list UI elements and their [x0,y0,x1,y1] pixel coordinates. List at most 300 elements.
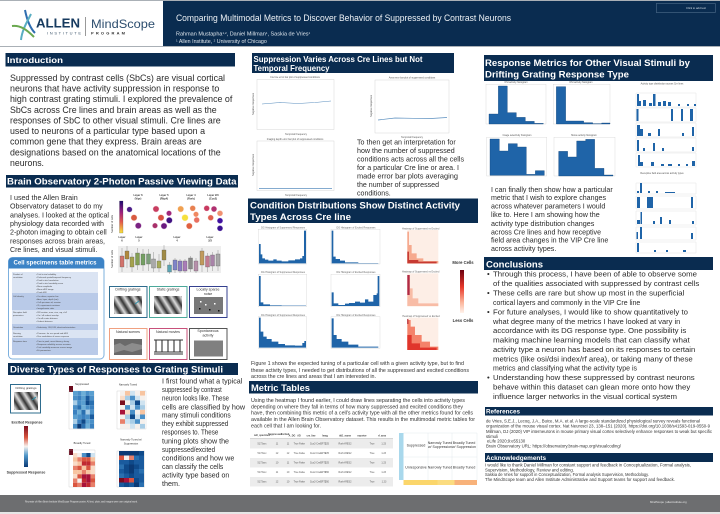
reference list: stimuli [486,434,498,439]
conclusions bullet list: • [487,289,490,298]
response metrics text: I can finally then show how a particular [491,186,613,194]
heatmap: narrowly tuned [117,382,146,429]
cell specimens table: • Fit parameters [36,349,51,352]
heading: introduction [6,53,235,66]
brain observatory text: physiology data recorded with [10,220,104,228]
multimodal metric table: True [370,480,375,484]
authors: 1 [266,31,268,35]
stacked bar charts: lower [636,172,696,253]
suppression text: how the number of suppressed [357,147,455,155]
multimodal metric table: 1.23 [381,442,387,446]
cell specimens table: • Response reliability across sessions [36,343,71,346]
drifting gratings key [10,384,40,413]
suppression text: the number of suppressed [357,181,439,189]
intro text: responses of SbC to other visual stimuli. Cre lines are [10,116,221,126]
acknowledgement text: The MindScope team and Allen Institute Administrative and Support teams for support and feedback. [485,477,675,482]
heading: response metrics: Drifting Grating Response Type [485,70,629,80]
layer dot map: Layer 2/3 [207,193,219,197]
histogram titles: DG Histogram of Excited Responses [337,271,376,274]
multimodal metric table: True [370,452,375,455]
multimodal metric table: Excited [281,433,290,436]
layer dot map: Number of cells [110,214,114,233]
line plot: brain area: Negative Responses [370,94,373,117]
panel: acknowledgements [485,453,713,482]
multimodal metric table: 12 [276,452,279,455]
heatmap: suppressed: Suppressed [75,382,89,386]
conclusions bullet list: metrics (like osi/dsi index/rf area), or taking many of these [493,354,693,363]
multimodal metric table: 11 [287,442,290,446]
bar chart titles: OSI activity histogram [504,81,528,84]
cell specimens table: • Mean dF/F image [36,289,54,291]
multimodal metric table: Cux2-CreERT2 [310,462,327,464]
activity type matrix: Narrowly Tuned [428,466,452,470]
cell specimens table: • Peak dF/F [36,292,48,294]
suppression text: To then get an interpretation for [357,138,456,146]
logo: Allen Institute MindScope Program: PROGRAM [91,30,126,36]
layer dot map: Layer 4 [186,193,196,197]
intro text: high contrast grating stimuli. I explored the prevalence of [10,94,233,104]
heading: conclusions: Conclusions [486,260,543,270]
multimodal metric table: 1.23 [381,462,387,464]
stimulus card: locally sparse noise: noise [204,292,212,296]
layer box plots: Layer [174,235,180,239]
cell specimens table: • Time to peak, onset latency, decay [36,340,70,343]
histogram titles: DG Histogram of Suppressed Responses [261,226,306,230]
button: click to add [656,4,715,12]
cell specimens table: • Preferred spatial/temporal frequency [36,276,72,279]
poster title: Comparing Multimodal Metrics to Discover Behavior of Suppressed by Contrast Neurons [176,13,512,23]
response metrics text: metric that I wish to explore changes [491,194,606,202]
figure caption: across the cre lines and areas that I am interested in. [251,374,376,380]
multimodal metric table: True [294,480,299,484]
layer dot map: (Vipr) [135,196,141,200]
multimodal metric table: 225 [325,452,330,455]
layer box plots [110,235,221,274]
multimodal metric table: 350 [325,471,330,474]
diverse responses text: cells are classified by how [162,402,246,411]
response metrics text: across activity types. [491,245,556,253]
intro text: neurons. [10,158,44,168]
cell specimens table: • Cell specimen id, session [36,302,62,304]
multimodal metric table: 1.23 [381,471,387,474]
multimodal metric table: 1.23 [382,480,387,484]
multimodal metric table: True [370,471,375,474]
response metrics text [491,186,613,253]
logo: Allen Institute MindScope Program: ALLEN [36,16,80,30]
line plot: cre line: Temporal Frequency [285,133,308,136]
multimodal metric table: Rorb-IRES2 [339,442,352,446]
multimodal metric table: cre_line [306,434,316,438]
intro text: designations based on the anatomical locations of the [10,148,221,158]
heading: suppression varies [252,53,454,73]
affiliations: 1 [176,38,178,42]
logo: Allen Institute MindScope Program [12,10,155,40]
conclusions bullet list: cortical layers and commonly in the VIP Cre line [493,298,640,307]
multimodal metric table: Cux2-CreERT2 [310,442,327,446]
heading: suppression varies: Temporal Frequency [254,63,330,73]
layer box plots: 6 [121,238,123,242]
drifting gratings key: Drifting gratings [15,386,37,390]
cell specimens table: correlation [13,276,24,279]
conclusions bullet list: influence larger networks in the visual cortical system [493,392,677,401]
bar chart titles: Image selectivity histogram [503,134,531,137]
cell specimens table: • On / off subunit overlap [36,314,60,317]
heatmap: broadly tuned: Broadly Tuned [74,441,91,445]
response metrics text: field area changes in the VIP Cre line [491,236,608,244]
heatmap: narrowly tuned with suppression: Narrowly Tuned w/ [120,438,142,442]
heading: response metrics [484,55,713,81]
bar charts: stimulus metric histograms [486,84,615,176]
conclusions bullet list: Through this process, I have been of able to observe some [493,270,697,279]
multimodal metric table: False [299,462,306,464]
activity type matrix: Suppressed [407,444,425,448]
heading: metric tables: Metric Tables [251,382,310,393]
layer box plots: 5 [138,238,140,242]
diverse responses text: conditions and how we [162,454,234,463]
authors: , Saskia de Vries [267,32,309,38]
metric tables text: available in the Allen Brain Observatory dataset. This results in the multimodal metric tables for [251,417,475,423]
intro text: SbCs across Cre lines and brain areas as well as the [10,105,217,115]
multimodal metric table: 5173xxx [258,442,267,446]
stacked bar charts: lower: Receptive field area across activity types [640,172,684,175]
multimodal metric table: True [370,442,375,446]
heatmap: narrowly tuned with suppression: Suppression [124,442,139,446]
diverse responses text: suppressed/excited [162,445,215,454]
line plot: cre line [252,76,334,136]
histogram row 1 [258,229,438,264]
diverse responses text: they exhibit suppressed [162,419,228,428]
multimodal metric table: 5173xxx [258,452,267,455]
histogram row 2 [258,273,438,307]
metric tables text: depending on where they fall in terms of how many suppressed and excited conditions they [251,404,463,410]
metric tables text: Using the heatmap I found earlier, I could draw lines separating the cells into activity types [251,398,465,404]
heading: references: References [486,408,521,416]
diverse responses text: can classify the cells [162,462,224,471]
panel: condition distributions [248,198,478,380]
conclusions bullet list: behave within this dataset can glean more onto how they [493,383,690,392]
figure caption: Figure 1 shows the expected tuning of a particular cell with a given activity type, but to find [251,361,464,367]
stimulus card: locally sparse noise [190,286,227,318]
diverse responses text: tuning plots show the [162,437,229,446]
stimulus card: static gratings: Static gratings [157,288,180,292]
metric tables text: each cell that I am looking for. [251,423,321,429]
authors: Rahman Mustapha [176,32,222,38]
stimulus card: drifting gratings: Drifting gratings [115,288,141,292]
multimodal metric table [250,433,393,486]
multimodal metric table: True [294,442,299,446]
layer box plots: Layer [119,235,125,239]
stimulus card: spontaneous activity: activity [203,334,214,338]
heatmap: broadly tuned [69,441,95,487]
line plot: brain area: Area error bar plot of suppressed conditions [389,76,436,80]
line plot: depth [252,138,334,197]
multimodal metric table: True [294,462,299,464]
diverse responses text: activity type based on [162,470,229,479]
cell specimens table: Running [13,333,22,335]
multimodal metric table: True [294,471,299,474]
multimodal metric table: Suppressed [268,433,282,436]
histogram titles: DG Histogram of Excited Responses [337,314,376,317]
cell specimens table: • On-off center distance [36,317,59,320]
layer dot map: (Rbp4) [160,196,168,200]
line plot: cre line: Cre line error bar plot of suppressed conditions [270,76,321,79]
histogram titles: DG Histogram of Excited Responses [337,226,376,230]
layer box plots: 4 [176,238,178,242]
intro text: neurons that have activity suppression in response to [10,84,219,94]
brain observatory text: I used the Allen Brain [10,194,78,202]
heading: condition distributions: Condition Distributions Show Distinct Activity [250,201,461,212]
multimodal metric table: False [299,480,306,484]
layer box plots: Layer [207,235,213,239]
cell density colour scale: Less Cells [453,318,474,323]
layer dot map [110,193,223,233]
conclusions bullet list [487,270,699,401]
reference list: Brain Observatory URL: https://observatory.brain-map.org/visualcoding/ [486,444,622,448]
response colour scale [7,420,45,474]
multimodal metric table: 325 [325,442,330,446]
reference list: eLife 2020;9:e55130 [487,438,526,444]
bar chart titles: DSI activity histogram [569,81,593,84]
panel: brain observatory data [6,175,238,360]
metric tables text: have, then combining this metric of a cell's activity type with all the other metrics found for cells [251,410,473,416]
conclusions bullet list: • [487,270,490,279]
multimodal metric table: 350 [325,480,330,484]
heatmap: suppressed [69,382,94,429]
multimodal metric table: True [294,452,299,455]
line plot: depth: Imaging depth error bar plot of suppressed conditions [267,138,324,141]
footer bar: Recreate of Allen Brain Institute MindScope Program poster. All text, plots, and images were own original work. [25,500,138,504]
heading: suppression varies: Suppression Varies Across Cre Lines but Not [254,54,423,64]
response metrics text: across Cre lines and how receptive [491,228,601,236]
affiliations: University of Chicago [215,39,267,45]
cell specimens table: Cell identity [13,295,25,298]
diverse responses text [162,376,246,488]
multimodal metric table: 12 [276,480,279,484]
cell specimens table: • Pearson r for run speed and dF/F [36,332,69,335]
heading: introduction: Introduction [7,55,63,65]
diverse responses text: suppressed by contrast [162,385,222,394]
histogram titles: Heatmap of Suppressed vs Excited [402,315,440,318]
activity type matrix: Broadly Tuned [453,441,475,445]
stimulus card: spontaneous activity: Spontaneous [197,329,219,333]
multimodal metric table: 11 [276,471,279,474]
multimodal metric table: Imag [322,434,328,438]
line plot: cre line: Negative Responses [252,92,255,115]
diverse responses text: neuron looks like. These [162,394,229,403]
reference list: Millman, DJ (2020) VIP interneurons in mouse primary visual cortex selectively enhance responses to weak but specific [486,429,712,434]
cell density colour scale [452,260,474,323]
cell specimens table: correlation [13,335,24,338]
suppression text: for a particular Cre line or area. I [357,164,459,172]
activity type matrix: w/ Suppression [452,445,476,449]
panel: references [485,407,713,448]
cell specimens table: • Trial variability measure across image [36,346,73,349]
response colour scale: Excited Response [12,420,42,424]
reference list [486,418,712,448]
cell specimens table: • Mean amplitude [36,285,53,288]
acknowledgement text: Supervision, Methodology, Review and editing. [485,468,574,472]
response metrics text: activity type distribution changes [491,220,595,228]
stacked bar charts: upper [636,82,696,167]
stimulus card: natural movies: Natural movies [156,330,180,334]
heading: acknowledgements: Acknowledgements [486,455,547,462]
conclusions bullet list: For future analyses, I would like to show quantitatively to [493,308,688,317]
diverse responses text: I first found what a typical [162,376,243,386]
layer dot map: (Cux2) [209,196,217,200]
stimulus card: natural movies [150,328,187,360]
heading: condition distributions [248,198,478,223]
activity type matrix: w/ Suppression [428,445,452,449]
logo: Allen Institute MindScope Program: INSTITUTE [47,30,81,36]
brain observatory text: 2-photon imaging to obtain cell [10,229,107,237]
cell specimens table: • Area, layer, depth (um) [36,298,59,301]
conclusions bullet list: These cells are rare but show up most in the superficial [493,289,685,298]
authors: 1 [309,31,311,35]
heatmap: narrowly tuned: Narrowly Tuned [119,382,138,386]
stimulus card: natural scenes: Natural scenes [116,330,140,334]
suppression text: conditions. [357,190,391,198]
suppression text [357,138,464,198]
affiliations: 2 [214,38,216,42]
cell specimens table: • Selectivity: OSI, DSI, direction/orientation [36,326,76,329]
stacked bar charts: upper: Activity type distribution across Cre lines [641,82,684,86]
histograms [258,229,438,350]
heading: response metrics: Response Metrics for Other Visual Stimuli by [485,58,691,68]
multimodal metric table: rf_area [378,434,387,438]
diverse responses text: responses to. These [162,428,218,437]
multimodal metric table: A_DG [289,434,295,438]
footer bar [0,495,720,514]
intro text: common gene that they express. Brain areas are [10,137,202,147]
cell specimens table: • Cre driver, reporter line [36,295,59,298]
authors: , Daniel Millman [227,32,266,38]
intro text [10,73,233,168]
metric tables text [251,398,475,429]
multimodal metric table: Rorb-IRES2 [339,471,352,474]
heading: condition distributions: Types Across Cre line [250,212,351,223]
conclusions bullet list: metrics and classifying what the activity type is [493,364,637,373]
cell specimens table: Orientation [13,326,24,329]
multimodal metric table: 12 [287,452,290,455]
stimulus card: spontaneous activity [190,328,227,360]
cell specimens table [8,258,104,359]
cell specimens table: • Image/movie stats [36,307,54,310]
multimodal metric table: False [299,452,306,455]
multimodal metric table: True [370,462,375,464]
multimodal metric table: 325 [325,462,330,464]
header banner [0,0,720,47]
suppression text: made error bar plots averaging [357,173,458,181]
affiliations: Allen Institute, [178,39,214,45]
line plot: brain area [370,76,449,139]
panel: diverse responses [7,363,246,488]
multimodal metric table: 10 [287,480,290,484]
cell specimens table: parameters [13,314,24,317]
cell specimens table: • Trial to trial reliability [36,273,57,276]
button: click to add: Click to add text [686,6,706,10]
figure caption: these activity types, I needed to get distributions of all the suppressed and excited conditions [251,368,469,374]
footer bar: MindScope | alleninstitute.org [650,500,687,504]
cell specimens table: • Subunit distance [36,320,54,323]
histogram titles: DG Histogram of Suppressed Responses [261,314,306,317]
diverse responses text: many stimuli conditions [162,411,231,420]
stimulus card: static gratings [150,286,187,318]
figure caption [251,361,469,380]
acknowledgement text [485,462,691,482]
line plot: brain area: Temporal Frequency [401,136,424,139]
heading: references [485,407,713,416]
brain observatory text: responses across brain areas, [10,237,105,245]
cell specimens table: Cell specimens table metrics [14,260,97,266]
heading: diverse types: Diverse Types of Responses to Grating Stimuli [10,365,223,376]
panel: conclusions [484,257,713,401]
diverse responses text: them. [162,479,180,488]
histogram titles: Heatmap of Suppressed vs Excited [402,228,440,230]
cell specimens table: • ID, experiment container [36,304,60,307]
multimodal metric table: False [299,471,306,474]
multimodal metric table: Cux2-CreERT2 [310,452,327,455]
heatmap: narrowly tuned with suppression [117,438,144,487]
multimodal metric table: 5173xxx [258,471,267,474]
conclusions bullet list: • [487,373,490,382]
cell specimens table: Response time [13,340,28,343]
layer dot map: Layer 5 [159,193,169,197]
intro text: Suppressed by contrast cells (SbCs) are visual cortical [10,73,225,83]
activity type matrix [399,433,477,485]
conclusions bullet list: activity type a neuron has based on its responses to certain [493,345,695,354]
conclusions bullet list: what degree many of the metrics I have looked at vary in [492,317,680,326]
conclusions bullet list: • [487,308,490,317]
panel: response metrics [484,55,713,253]
multimodal metric table: Rorb-IRES2 [339,462,352,464]
activity type matrix: Unresponsive [405,466,427,470]
authors: 1,2 [222,31,227,35]
multimodal metric table: tld1_name [339,434,352,438]
heading: acknowledgements [485,453,713,462]
response metrics text: across whatever parameters I would [491,202,605,210]
multimodal metric table: False [299,442,306,446]
cell specimens table: Receptive field [13,311,27,314]
panel: metric tables [249,381,478,486]
multimodal metric table: 5173xxx [258,462,267,464]
multimodal metric table: Cux2-CreERT2 [310,480,327,484]
multimodal metric table: 10 [276,462,279,464]
activity type matrix: Narrowly Tuned [428,441,452,445]
conclusions bullet list: making machine learning models that can classify what [493,336,691,345]
response colour scale: Suppressed Response [7,470,45,474]
reference list: de Vries, S.E.J., Lecoq, J.A., Buice, M.A. et al. A large-scale standardized physiological survey reveals functional [486,418,700,424]
logo: Allen Institute MindScope Program: MindScope [91,17,155,31]
stimulus card: natural scenes [110,328,147,360]
cell specimens table: • Run modulation of mean response [36,335,70,338]
heading: brain observatory: Brain Observatory 2-Photon Passive Viewing Data [7,177,237,188]
multimodal metric table: cell_specimen [254,434,271,437]
cell specimens table: • Peak to trial correlation [36,279,59,282]
acknowledgement text: Saskia de Vries for support in Conceptualization, Formal analysis Supervision, Methodology. [485,472,649,477]
multimodal metric table: 11 [276,442,279,446]
conclusions bullet list: Understanding how these suppressed by contrast neurons [493,373,695,382]
stimulus card: locally sparse noise: Locally sparse [197,288,219,292]
activity type matrix: Broadly Tuned [453,466,475,470]
heading: metric tables [249,381,478,394]
bar chart titles: Movie activity histogram [571,134,597,137]
layer dot map: Layer 6 [133,193,143,197]
multimodal metric table: Cux2-CreERT2 [310,471,327,474]
brain observatory text: analyses. I looked at the optical [10,211,109,219]
histogram row 3 [258,317,438,350]
multimodal metric table: Rorb-IRES2 [339,452,352,455]
heading: conclusions [484,257,713,270]
